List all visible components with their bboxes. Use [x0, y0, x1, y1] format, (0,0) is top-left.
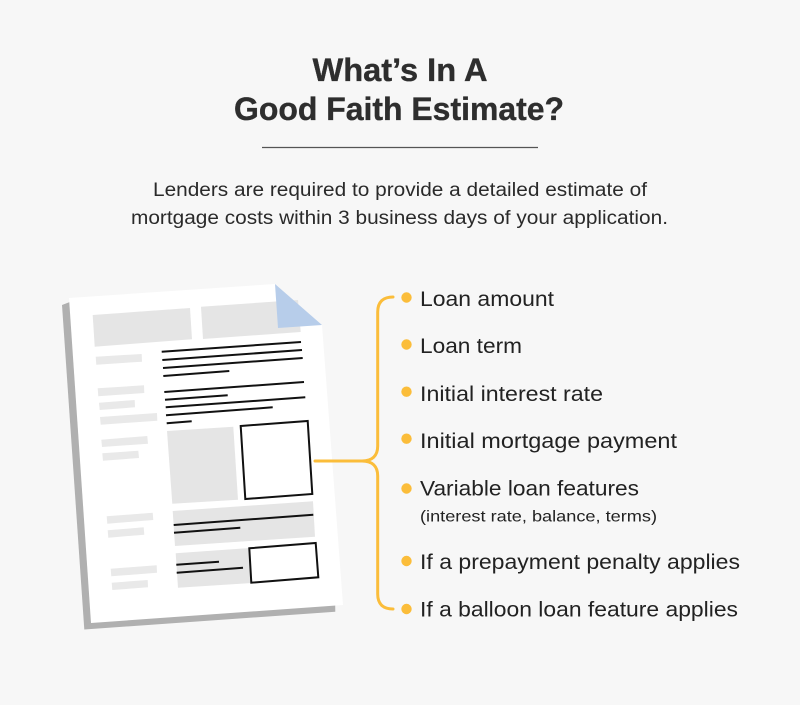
list labels: (interest rate, balance, terms): [420, 508, 657, 526]
bullet list: [401, 288, 740, 622]
list labels: Loan term: [420, 335, 522, 358]
document page: [69, 284, 343, 623]
list labels: Loan amount: [420, 288, 554, 311]
bullet markers: [401, 292, 412, 614]
list labels: Variable loan features: [420, 478, 639, 500]
outlined box: [241, 421, 312, 499]
list labels: If a balloon loan feature applies: [420, 598, 738, 622]
gray band with lines: [173, 501, 315, 546]
list labels: Initial mortgage payment: [420, 430, 677, 453]
intro text: Lenders are required to provide a detailed estimate of: [153, 180, 648, 201]
intro text: [131, 180, 668, 229]
document shadow: [62, 300, 335, 630]
image placeholder: [167, 427, 238, 504]
list labels: If a prepayment penalty applies: [420, 551, 740, 574]
bracket connector: [315, 297, 393, 609]
list labels: Initial interest rate: [420, 383, 603, 406]
title: What’s In A: [312, 52, 488, 88]
signature band: [176, 543, 318, 588]
left column placeholders: [96, 354, 157, 590]
header blocks: [93, 300, 301, 347]
text lines: [162, 342, 305, 423]
title: Good Faith Estimate?: [234, 91, 564, 127]
document illustration: [62, 284, 343, 630]
list labels: [420, 288, 740, 622]
folded corner: [275, 284, 322, 328]
intro text: mortgage costs within 3 business days of your application.: [131, 208, 668, 229]
title: [234, 52, 564, 127]
